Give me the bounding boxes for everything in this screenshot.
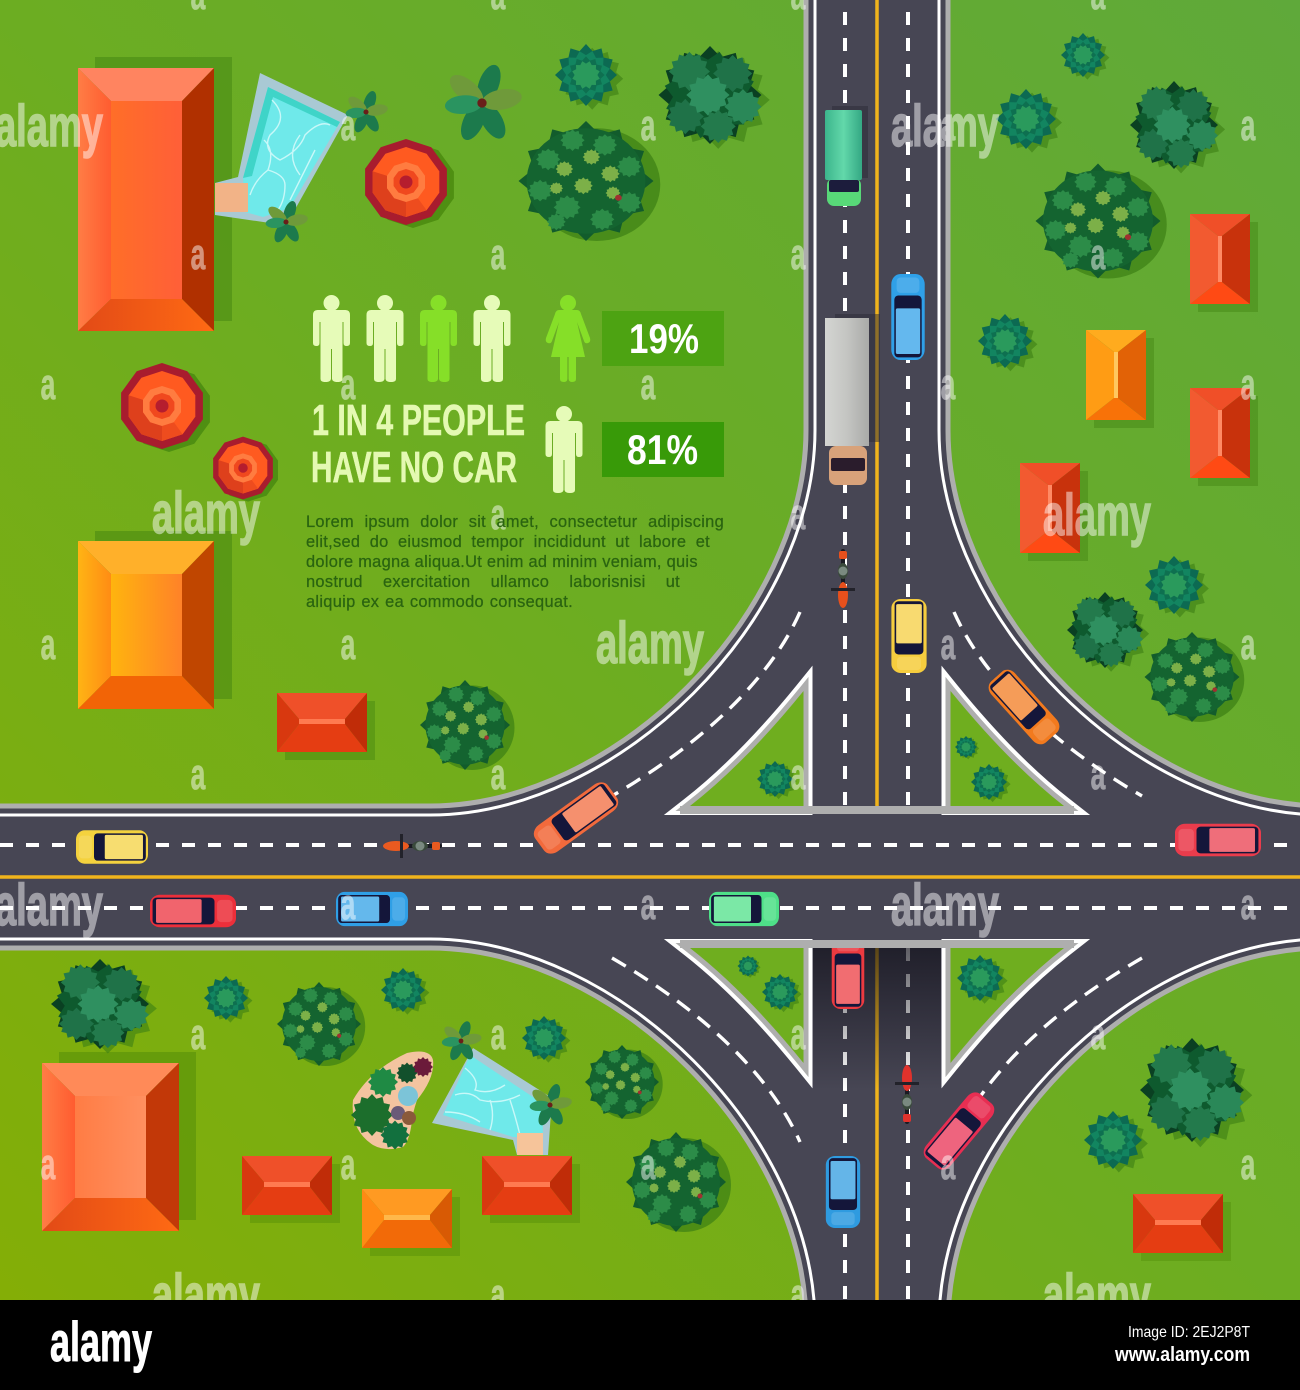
stat: 81 percent	[602, 422, 724, 477]
body text: elit,sed do eiusmod tempor incididunt ut labore et	[306, 533, 710, 551]
motorcycle west road	[383, 834, 442, 858]
island trees	[738, 736, 1011, 1012]
traffic islands	[690, 691, 1064, 1063]
house: small red roof right 3	[1020, 463, 1088, 561]
garden bed	[351, 1052, 433, 1150]
house: small red roof right 1	[1190, 214, 1258, 312]
car: blue lower road	[336, 892, 408, 926]
house: small red roof right 2	[1190, 388, 1258, 486]
swimming pool bottom	[432, 1048, 552, 1155]
trees	[48, 33, 1252, 1232]
footer website: www.alamy.com	[1114, 1344, 1250, 1366]
watermarks: a	[641, 359, 656, 409]
stat: 19 percent	[602, 311, 724, 366]
watermarks: alamy	[891, 873, 999, 938]
umbrella 3	[213, 437, 278, 502]
watermarks: a	[791, 1009, 806, 1059]
watermarks: a	[341, 100, 356, 150]
watermarks: a	[791, 489, 806, 539]
bridge kerbs	[680, 806, 1074, 948]
watermarks: a	[1091, 1009, 1106, 1059]
motorcycle south road	[895, 1065, 919, 1124]
watermarks: alamy	[1043, 1263, 1151, 1328]
car: green lower road	[709, 892, 779, 926]
house: small orange roof right	[1086, 330, 1154, 428]
watermarks: a	[791, 1269, 806, 1319]
watermarks: a	[941, 100, 956, 150]
watermarks: alamy	[1043, 483, 1151, 548]
stat: 19 percent: 19%	[629, 315, 699, 362]
car: yellow north road	[891, 599, 927, 673]
watermarks: a	[791, 229, 806, 279]
infographic: people row	[313, 295, 510, 382]
plant by pool	[345, 89, 389, 134]
footer logo: alamy	[50, 1310, 152, 1373]
car: blue north road	[891, 274, 925, 360]
house: large orange roof left	[78, 531, 232, 709]
car: red east road	[1175, 824, 1261, 856]
house: large roof bottom-left	[42, 1052, 196, 1231]
footer bar	[0, 1300, 1300, 1390]
watermarks: a	[491, 229, 506, 279]
house: small orange roof bottom	[362, 1189, 460, 1256]
swimming pool top	[215, 73, 348, 223]
watermarks: a	[191, 1009, 206, 1059]
watermarks: alamy	[152, 1263, 260, 1328]
house: small red roof centre	[277, 693, 375, 760]
car: pink south ramp	[920, 1089, 998, 1173]
house: small red roof bottom 1	[242, 1156, 340, 1223]
watermarks: a	[1091, 229, 1106, 279]
vertical road lane dashes	[845, 0, 908, 1300]
watermarks: a	[1241, 879, 1256, 929]
watermarks: a	[41, 359, 56, 409]
watermarks: alamy	[152, 481, 260, 546]
watermarks: a	[491, 1009, 506, 1059]
house: large red roof top-left	[78, 57, 232, 331]
red car under bridge	[832, 948, 864, 1009]
heading	[311, 396, 525, 492]
watermarks: a	[641, 879, 656, 929]
bridge shadow on lower road	[813, 948, 941, 1082]
watermarks: a	[641, 100, 656, 150]
umbrella 2	[121, 363, 210, 452]
watermarks: a	[491, 749, 506, 799]
body text: Lorem ipsum dolor sit amet, consectetur adipiscing	[306, 513, 724, 531]
truck: grey semi trailer	[825, 314, 880, 485]
watermarks: a	[1241, 100, 1256, 150]
bridge deck: horizontal road	[832, 939, 864, 940]
watermarks: alamy	[596, 611, 704, 676]
watermarks: a	[641, 1139, 656, 1189]
watermarks: a	[941, 359, 956, 409]
umbrella 1	[365, 139, 454, 228]
plant below pool	[265, 199, 309, 244]
horizontal road yellow centre line	[0, 875, 1300, 879]
bridge deck fill between islands	[650, 815, 1104, 939]
watermarks: a	[341, 619, 356, 669]
watermarks: a	[341, 1139, 356, 1189]
footer image id: Image ID: 2EJ2P8T	[1128, 1324, 1250, 1341]
watermarks: a	[941, 1139, 956, 1189]
icon: woman	[546, 295, 590, 382]
watermarks: a	[191, 229, 206, 279]
house: small red roof bottom right	[1133, 1194, 1231, 1261]
plant large	[445, 64, 522, 140]
plant by lower pool right	[529, 1082, 573, 1127]
body text: dolore magna aliqua.Ut enim ad minim veniam, quis	[306, 553, 698, 571]
heading: HAVE NO CAR	[311, 443, 517, 492]
icon: man	[546, 406, 582, 493]
watermarks: a	[1241, 1139, 1256, 1189]
body text	[306, 513, 724, 611]
motorcycle north road	[831, 549, 855, 608]
watermarks: a	[1091, 749, 1106, 799]
watermarks: a	[491, 1269, 506, 1319]
vertical road yellow centre line	[875, 0, 879, 1300]
watermarks: a	[1241, 359, 1256, 409]
car: blue south road	[826, 1156, 860, 1228]
watermarks: a	[1241, 619, 1256, 669]
watermarks: a	[41, 619, 56, 669]
heading: 1 IN 4 PEOPLE	[312, 396, 525, 445]
watermarks: a	[791, 749, 806, 799]
watermarks: a	[941, 619, 956, 669]
car: coral ramp	[530, 778, 622, 858]
watermarks: a	[341, 879, 356, 929]
body text: nostrud exercitation ullamco laborisnisi ut	[306, 573, 680, 591]
watermarks: a	[191, 749, 206, 799]
watermarks: alamy	[891, 94, 999, 159]
watermarks: a	[41, 1139, 56, 1189]
car: yellow west road	[76, 830, 148, 864]
car: orange ramp	[985, 666, 1063, 748]
body text: aliquip ex ea commodo consequat.	[306, 593, 573, 611]
car: red lower road	[150, 895, 236, 927]
stat: 81 percent: 81%	[627, 426, 698, 473]
house: small red roof bottom 2	[482, 1156, 580, 1223]
watermarks: a	[491, 489, 506, 539]
ramp lane dashes	[612, 612, 1142, 1142]
horizontal road lane dashes	[0, 845, 1300, 908]
watermarks: a	[341, 359, 356, 409]
truck: green	[825, 106, 868, 206]
plant by lower pool left	[441, 1020, 482, 1062]
